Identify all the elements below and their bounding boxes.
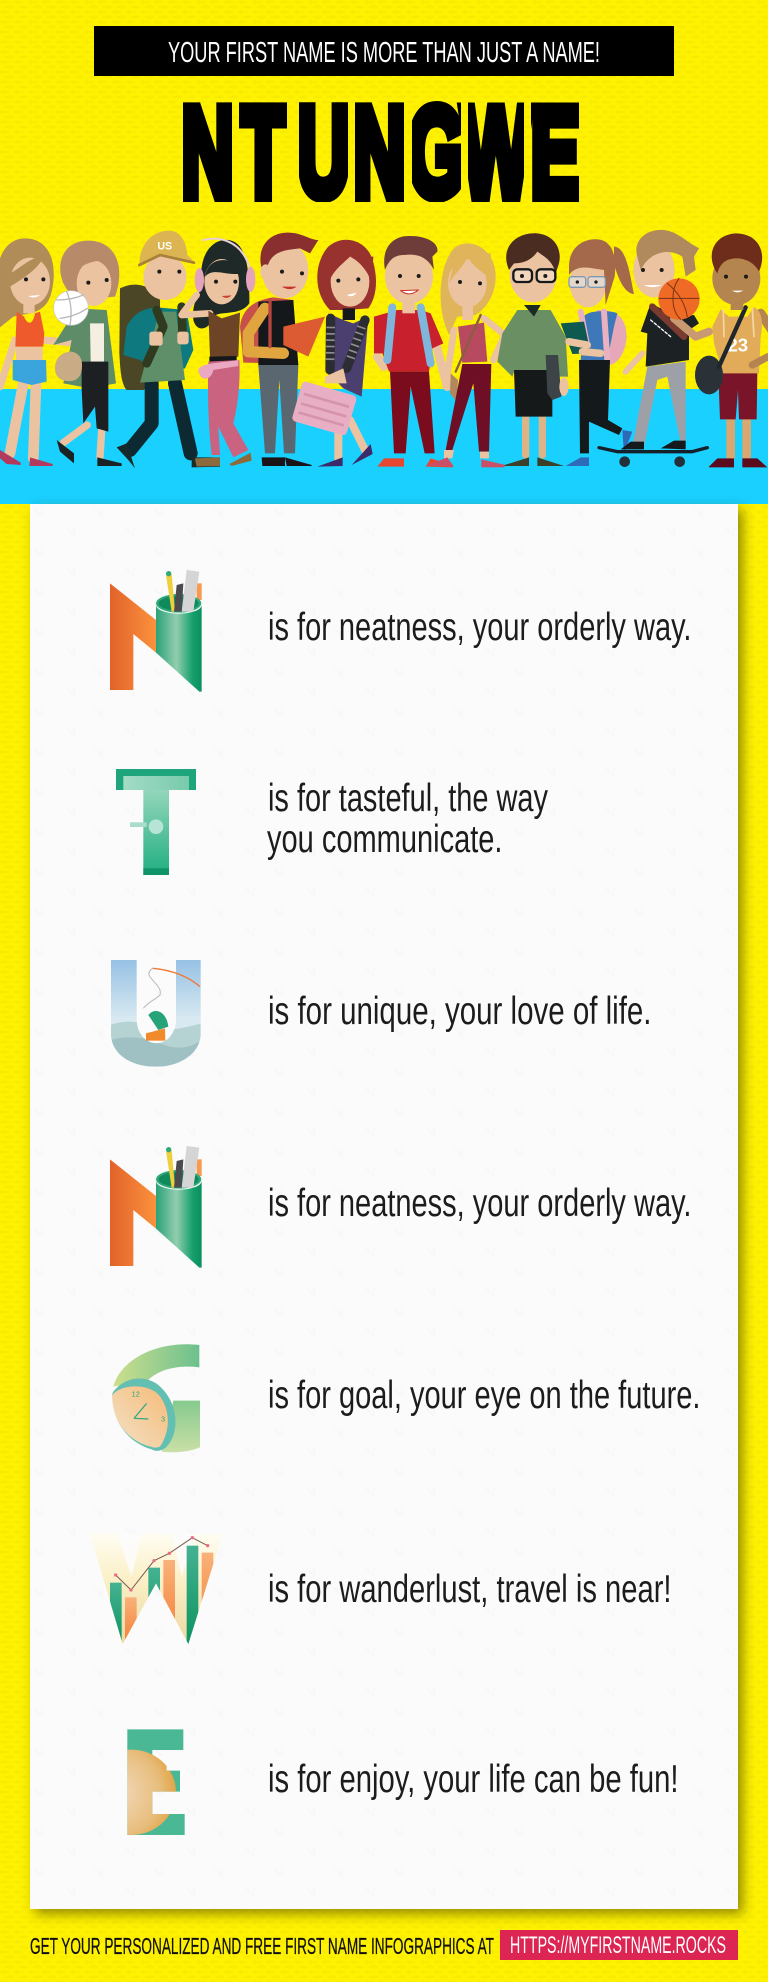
- person 7: boy in red shirt: [374, 236, 452, 467]
- person 6: girl with pink bag: [291, 240, 376, 467]
- row 2 text: is for tasteful, the way: [268, 777, 548, 820]
- group of people, right half: [374, 230, 768, 467]
- row 3 text: is for unique, your love of life.: [268, 990, 652, 1033]
- white content panel: [30, 504, 738, 1909]
- person 5: boy with book: [240, 233, 325, 466]
- group of people, left half: [0, 231, 376, 468]
- row 3: letter U icon, fishing: [110, 960, 202, 1070]
- title: name: NTUNGWE: [181, 81, 580, 223]
- person 3: boy with backpack and cap: [117, 231, 220, 468]
- person 2: girl with volleyball: [53, 241, 122, 466]
- person 9: boy with glasses: [497, 233, 569, 466]
- row 2: letter T icon, door: [116, 769, 196, 875]
- row 4: letter N icon, pen holder: [110, 1146, 202, 1268]
- person 4: girl with headphones: [182, 239, 255, 466]
- row 5: letter G icon, clock: 12: [132, 1390, 140, 1399]
- person 3: boy with backpack and cap: US: [157, 240, 172, 252]
- person 12: boy in yellow tank: [695, 233, 768, 467]
- person 8: blond girl: [426, 243, 506, 467]
- person 12: boy in yellow tank: 23: [727, 335, 748, 356]
- person 10: girl with ponytail and tablet: [561, 239, 634, 466]
- row 2 text: [267, 777, 548, 861]
- person 11: skateboarder with basketball: [599, 230, 709, 467]
- person 1: girl in orange top: [0, 238, 78, 466]
- cyan floor band: [0, 389, 768, 504]
- row 2 text: you communicate.: [267, 818, 502, 861]
- row 7: letter E icon, moon: [127, 1729, 185, 1835]
- row 1: letter N icon, pen holder: [110, 570, 202, 692]
- row 5: letter G icon, clock: 3: [161, 1415, 165, 1424]
- row 6: letter W icon, bar chart: [90, 1534, 223, 1648]
- header banner: [94, 26, 674, 76]
- row 5: letter G icon, clock: [112, 1344, 200, 1452]
